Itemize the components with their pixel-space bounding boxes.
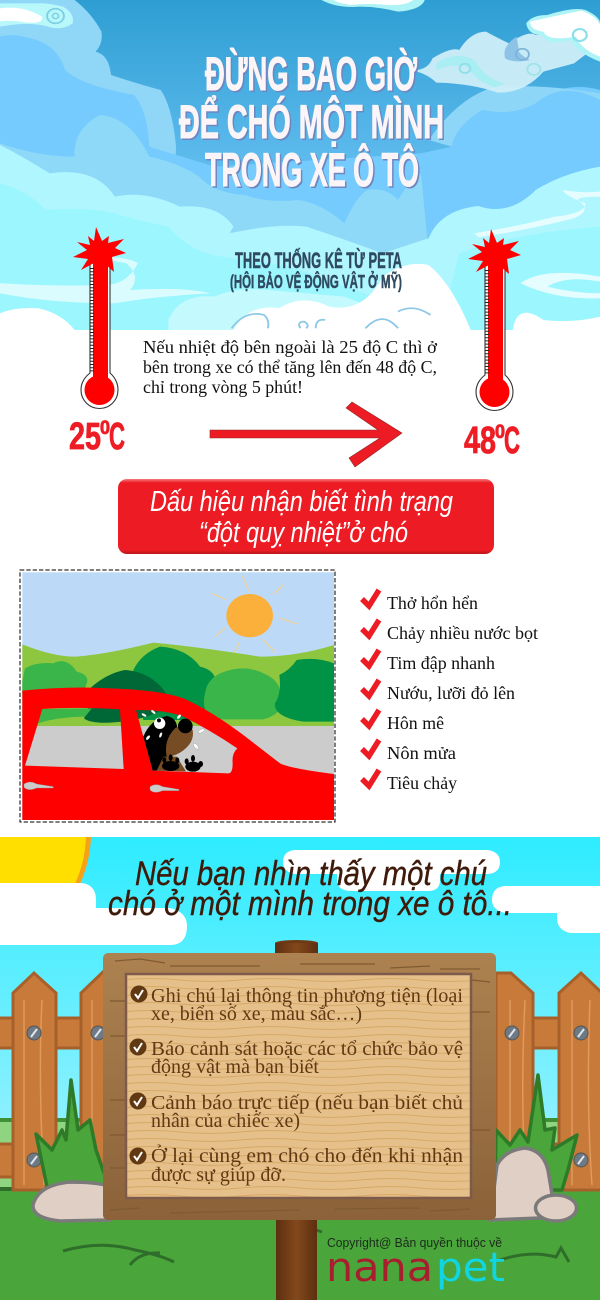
illustration: dog in hot car [20, 570, 335, 822]
text block: action steps [130, 985, 463, 1186]
text block: action steps: Cảnh báo trực tiếp (nếu bạn biết chủ [151, 1092, 463, 1114]
banner: heat stroke signs [118, 479, 494, 554]
checklist: symptoms [362, 590, 538, 793]
text block: action steps: Ghi chú lại thông tin phương tiện (loại [151, 985, 463, 1007]
checklist: symptoms: Tiêu chảy [387, 773, 457, 793]
fence [0, 970, 600, 1190]
rocks [33, 1148, 576, 1221]
label: 25 C: C [109, 416, 125, 458]
grass tufts [36, 1075, 577, 1190]
source heading: PETA: THEO THỐNG KÊ TỪ PETA [235, 247, 402, 273]
title: TRONG XE Ô TÔ [206, 144, 420, 198]
title: ĐỪNG BAO GIỜ [206, 48, 419, 102]
signpost [103, 940, 496, 1300]
source heading: PETA [230, 247, 402, 292]
thermometer: 25 degrees [73, 227, 126, 408]
label: 48 C: C [504, 420, 520, 462]
text block: action steps: được sự giúp đỡ. [151, 1164, 286, 1186]
logo: nanapet: pet [436, 1245, 505, 1291]
thermometer: 48 degrees [468, 229, 521, 410]
checklist: symptoms: Nôn mửa [387, 743, 456, 763]
text block: action steps: xe, biển số xe, màu sắc…) [151, 1003, 362, 1025]
checklist: symptoms: Thở hổn hển [387, 593, 478, 613]
copyright: Copyright@ Bản quyền thuộc về [327, 1236, 502, 1250]
logo: nanapet: nana [326, 1245, 433, 1291]
heading: if you see a dog [108, 855, 512, 923]
text block: action steps: nhân của chiếc xe) [151, 1110, 300, 1132]
ground marks [63, 1228, 569, 1265]
heading: if you see a dog: Nếu bạn nhìn thấy một chú [135, 855, 487, 893]
panel: garden scene [0, 837, 600, 1300]
text block: temperature fact: chỉ trong vòng 5 phút! [143, 377, 303, 397]
arrow [210, 402, 402, 467]
title: TRONG XE Ô TÔ [205, 143, 419, 196]
title: ĐỪNG BAO GIỜ [205, 47, 418, 100]
text block: temperature fact: bên trong xe có thể tăng lên đến 48 độ C, [143, 357, 437, 377]
label: 48 C: 0 [495, 422, 505, 443]
label: 25 C: 25 [69, 416, 101, 458]
icon: dog [141, 709, 205, 772]
text block: action steps: động vật mà bạn biết [151, 1056, 319, 1078]
banner: heat stroke signs: Dấu hiệu nhận biết tình trạng [150, 486, 453, 518]
text block: temperature fact [143, 337, 437, 397]
checklist: symptoms: Chảy nhiều nước bọt [387, 623, 538, 643]
logo: nanapet [326, 1245, 505, 1291]
label: 48 C: 48 [464, 420, 496, 462]
checklist: symptoms: Nướu, lưỡi đỏ lên [387, 683, 515, 703]
text block: action steps: Ở lại cùng em chó cho đến khi nhận [151, 1144, 463, 1167]
checklist: symptoms: Hôn mê [387, 713, 444, 733]
banner: heat stroke signs: “đột quỵ nhiệt”ở chó [199, 517, 408, 549]
text block: action steps: Báo cảnh sát hoặc các tổ chức bảo vệ [151, 1038, 463, 1060]
text block: temperature fact: Nếu nhiệt độ bên ngoài là 25 độ C thì ở [143, 337, 437, 357]
title: ĐỂ CHÓ MỘT MÌNH [179, 95, 444, 148]
source heading: PETA: (HỘI BẢO VỆ ĐỘNG VẬT Ở MỸ) [230, 271, 402, 292]
title [179, 47, 446, 198]
panel: sky header [0, 0, 600, 330]
label: 25 C: 0 [100, 418, 110, 439]
checklist: symptoms: Tim đập nhanh [387, 653, 495, 673]
heading: if you see a dog: chó ở một mình trong xe ô tô... [108, 885, 512, 923]
